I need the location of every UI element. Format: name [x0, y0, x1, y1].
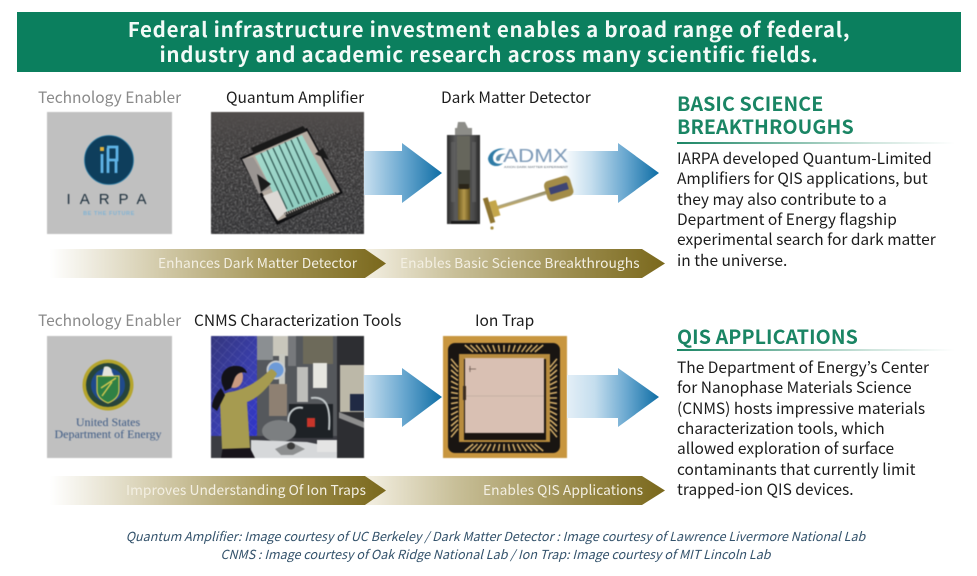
logo: department of energy: [46, 336, 172, 458]
footer: image credits: Quantum Amplifier: Image courtesy of UC Berkeley / Dark Matter Detector : Image courtesy of Lawrence Livermore National Lab: [126, 526, 865, 545]
logo: ADMX: [487, 146, 568, 169]
text: QIS description: (CNMS) hosts impressive materials: [677, 397, 925, 419]
arrow: gold banner 2: [366, 249, 665, 278]
logo: department of energy: Department of Energy: [54, 427, 162, 441]
text: basic science description: Amplifiers for QIS applications, but: [677, 167, 928, 189]
logo: department of energy: United States: [76, 415, 140, 429]
text: QIS description: for Nanophase Materials Science: [677, 376, 912, 398]
text: basic science description: IARPA developed Quantum-Limited: [677, 147, 932, 169]
text: basic science description: experimental search for dark matter: [677, 228, 936, 250]
text: basic science description: in the universe.: [677, 249, 787, 271]
banner text: enhances: Enhances Dark Matter Detector: [158, 252, 357, 272]
photo: quantum amplifier chip: [210, 111, 365, 235]
logo: IARPA: IARPA: [67, 191, 155, 208]
arrow: gold banner 1: [60, 249, 386, 278]
photo: CNMS researcher at instrument: [210, 335, 365, 459]
label: technology enabler 2: Technology Enabler: [38, 309, 181, 331]
arrow: blue arrow 1: [364, 143, 442, 203]
panel: row 2 labels: [38, 309, 534, 331]
logo: IARPA: [46, 112, 172, 234]
text: QIS description: trapped-ion QIS devices.: [677, 478, 854, 500]
label: quantum amplifier: Quantum Amplifier: [226, 86, 364, 108]
heading: basic science breakthroughs: [677, 88, 854, 140]
heading: QIS applications: QIS APPLICATIONS: [677, 321, 858, 350]
arrow: gold banner 3: [60, 476, 386, 505]
text: basic science description: Department of Energy flagship: [677, 208, 897, 230]
label: CNMS tools: CNMS Characterization Tools: [194, 309, 401, 331]
panel: row 1 labels: [38, 86, 591, 108]
divider: heading underline 2: [677, 349, 955, 351]
divider: heading underline 1: [677, 142, 955, 144]
text: QIS description: characterization tools, which: [677, 417, 885, 439]
text: basic science description: [677, 147, 936, 271]
footer: image credits: [126, 526, 866, 563]
banner: headline: [17, 12, 961, 72]
arrow: blue arrow 3: [364, 368, 442, 427]
label: ion trap: Ion Trap: [475, 309, 534, 331]
logo: ADMX: AXION DARK MATTER EXPERIMENT: [504, 165, 568, 169]
text: QIS description: [677, 356, 929, 500]
heading: basic science breakthroughs: BASIC SCIENCE: [677, 88, 823, 117]
photo: ion trap chip: [442, 335, 568, 459]
banner text: improves understanding: Improves Understanding Of Ion Traps: [126, 479, 366, 499]
arrow: blue arrow 4: [567, 368, 659, 427]
heading: basic science breakthroughs: BREAKTHROUGHS: [677, 111, 854, 140]
text: QIS description: The Department of Energy’s Center: [677, 356, 929, 378]
logo: IARPA: BE THE FUTURE: [83, 211, 135, 217]
footer: image credits: CNMS : Image courtesy of Oak Ridge National Lab / Ion Trap: Image courtesy of MIT Lincoln Lab: [220, 544, 771, 563]
label: technology enabler 1: Technology Enabler: [38, 86, 181, 108]
image: dark matter detector: [446, 121, 574, 230]
banner: headline: industry and academic research across many scientific fields.: [159, 38, 819, 68]
text: QIS description: allowed exploration of surface: [677, 437, 894, 459]
banner text: enables basic science: Enables Basic Science Breakthroughs: [400, 252, 640, 272]
label: dark matter detector: Dark Matter Detector: [441, 86, 591, 108]
arrow: gold banner 4: [366, 476, 665, 505]
banner: headline: Federal infrastructure investment enables a broad range of federal,: [128, 13, 850, 43]
banner text: enables QIS: Enables QIS Applications: [483, 479, 643, 499]
arrow: blue arrow 2: [566, 143, 659, 203]
text: QIS description: contaminants that currently limit: [677, 458, 915, 480]
text: basic science description: they may also contribute to a: [677, 188, 887, 210]
